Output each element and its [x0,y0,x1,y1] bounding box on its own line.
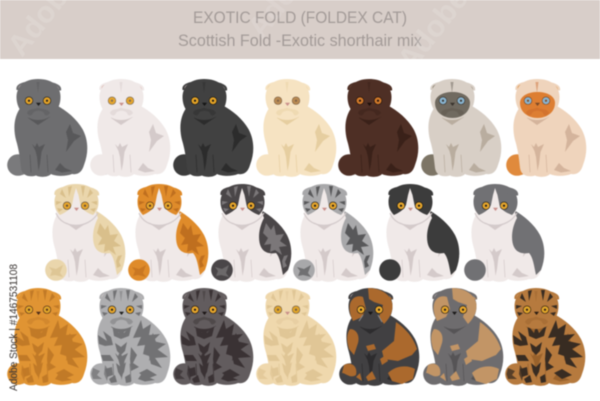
subtitle: Scottish Fold -Exotic shorthair mix [178,31,422,50]
row 1: solid colours [7,79,586,177]
watermark: diagonal Adobe marks [2,0,475,76]
cat: silver tabby [90,288,170,386]
title: EXOTIC FOLD (FOLDEX CAT) [193,8,407,27]
cat: red tabby [7,288,87,386]
cat: cream tabby [256,288,336,386]
cat: black tabby and white [211,184,291,282]
cat: red point [506,79,586,177]
cat: black and white [379,184,459,282]
row 2: bicolour cats [45,184,544,282]
cat: cream [256,79,336,177]
cat: white [90,79,170,177]
cat: black tortie [339,288,419,386]
cat: cream tabby and white [45,184,125,282]
cat: red tabby and white [128,184,208,282]
cat: chocolate [338,79,418,177]
cat: seal point [421,79,501,177]
row 3: tabby and tortie cats [7,288,585,386]
cat: brown tabby [505,288,585,386]
cat: blue tortie [423,288,503,386]
cat: black [173,79,253,177]
watermark: stock id: Adobe Stock | #1467531108 [8,264,20,391]
cat: silver tabby and white [293,184,373,282]
cat: blue and white [464,184,544,282]
cat: blue [7,79,87,177]
cat: black tabby [173,288,253,386]
header band [0,0,600,59]
